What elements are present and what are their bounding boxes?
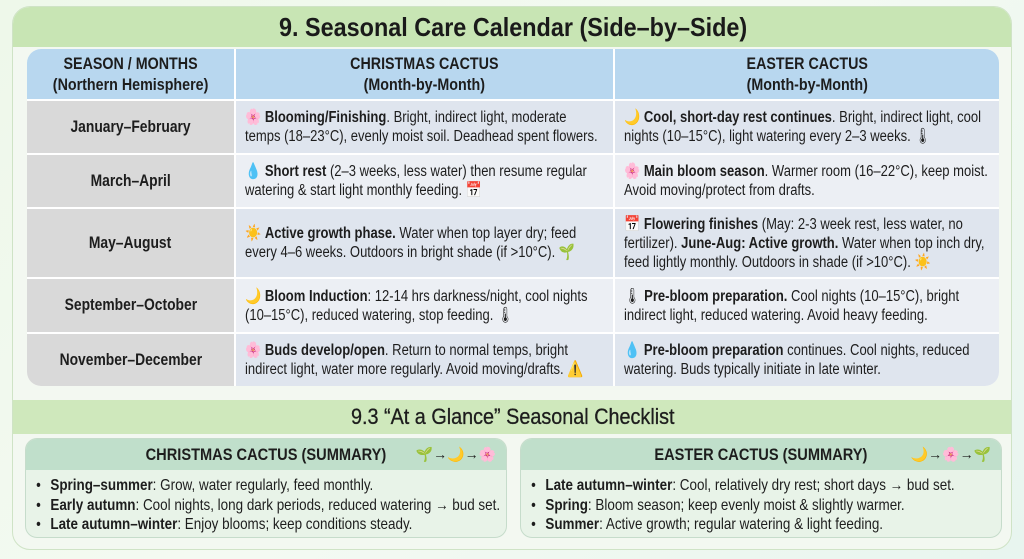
- header: christmas: (Month-by-Month): [364, 75, 485, 94]
- calendar table: 🌡 Pre-bloom preparation. Cool nights (10–15°C), bright indirect light, reduced watering. Avoid heavy feeding.: [624, 288, 959, 324]
- easter summary header: EASTER CACTUS (SUMMARY): [654, 445, 868, 464]
- row 4: [27, 279, 234, 332]
- calendar table: 🌸 Blooming/Finishing. Bright, indirect light, moderate temps (18–23°C), evenly moist soil. Deadhead spent flowers.: [245, 109, 598, 145]
- easter summary list: Late autumn–winter: Cool, relatively dry rest; short days → bud set.: [545, 477, 955, 494]
- christmas summary list: Early autumn: Cool nights, long dark periods, reduced watering → bud set.: [50, 496, 500, 514]
- calendar table: [27, 49, 999, 386]
- title: 9. Seasonal Care Calendar (Side–by–Side): [279, 12, 747, 42]
- summary: easter: [520, 438, 1002, 538]
- header: easter: [615, 49, 999, 99]
- easter summary list: Summer: Active growth; regular watering & light feeding.: [545, 516, 883, 533]
- easter summary list: Spring: Bloom season; keep evenly moist & slightly warmer.: [545, 496, 905, 514]
- title: [13, 7, 1013, 47]
- calendar table: 🌸 Buds develop/open. Return to normal temps, bright indirect light, water more regularly. Avoid moving/drafts. ⚠️: [245, 342, 583, 378]
- calendar table: 💧 Pre-bloom preparation continues. Cool nights, reduced watering. Buds typically initiate in late winter.: [624, 342, 969, 378]
- calendar table: 💧 Short rest (2–3 weeks, less water) then resume regular watering & start light monthly feeding. 📅: [245, 163, 587, 199]
- row 5: November–December: [59, 350, 202, 368]
- row 3: May–August: [89, 234, 172, 252]
- row 3: [27, 209, 234, 277]
- christmas summary header: CHRISTMAS CACTUS (SUMMARY): [146, 445, 386, 464]
- calendar table: ☀️ Active growth phase. Water when top layer dry; feed every 4–6 weeks. Outdoors in bright shade (if >10°C). 🌱: [245, 225, 576, 261]
- easter summary header: 🌙→🌸→🌱: [911, 446, 991, 462]
- christmas summary header: 🌱→🌙→🌸: [416, 446, 496, 462]
- row 1: [27, 101, 234, 153]
- christmas summary header: [26, 439, 506, 470]
- calendar table: 🌙 Bloom Induction: 12-14 hrs darkness/night, cool nights (10–15°C), reduced watering, stop feeding. 🌡: [245, 288, 588, 324]
- section heading: 9.3 “At a Glance” Seasonal Checklist: [351, 404, 675, 429]
- header: season: (Northern Hemisphere): [53, 75, 208, 94]
- calendar table: 🌸 Main bloom season. Warmer room (16–22°C), keep moist. Avoid moving/protect from drafts.: [624, 163, 988, 199]
- christmas summary list: Spring–summer: Grow, water regularly, feed monthly.: [50, 477, 373, 494]
- header: christmas: CHRISTMAS CACTUS: [350, 54, 499, 73]
- christmas summary list: [36, 477, 500, 533]
- row 5: [27, 334, 234, 386]
- header: christmas: [236, 49, 613, 99]
- christmas summary list: Late autumn–winter: Enjoy blooms; keep conditions steady.: [50, 516, 412, 533]
- header: season: SEASON / MONTHS: [63, 54, 198, 73]
- easter summary header: [521, 439, 1001, 470]
- row 2: March–April: [90, 172, 171, 190]
- header: easter: EASTER CACTUS: [746, 54, 868, 73]
- summary: christmas: [25, 438, 507, 538]
- header: easter: (Month-by-Month): [746, 75, 868, 94]
- easter summary list: [532, 477, 955, 533]
- row 4: September–October: [64, 296, 197, 314]
- row 2: [27, 155, 234, 207]
- header: season: [27, 49, 234, 99]
- calendar table: 📅 Flowering finishes (May: 2-3 week rest, less water, no fertilizer). June-Aug: Active growth. Water when top inch dry, feed lightly monthly. Outdoors in shade (if >10°C). ☀️: [624, 216, 985, 270]
- section heading: [13, 400, 1013, 434]
- calendar table: 🌙 Cool, short-day rest continues. Bright, indirect light, cool nights (10–15°C), light watering every 2–3 weeks. 🌡: [624, 109, 981, 145]
- row 1: January–February: [70, 118, 191, 136]
